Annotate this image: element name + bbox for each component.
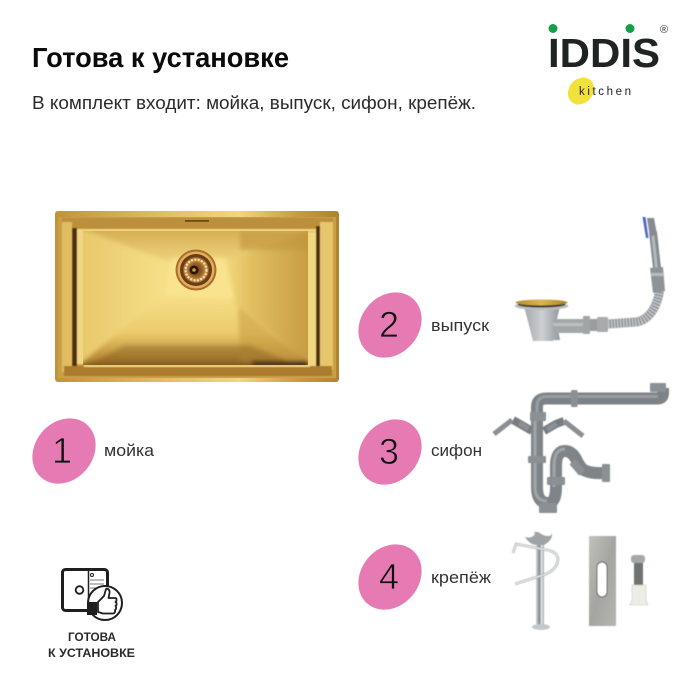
badge 3: [345, 407, 435, 497]
badge 3: 3: [379, 431, 399, 472]
label: выпуск: выпуск: [431, 316, 490, 335]
logo: IDDIS kitchen: [548, 24, 668, 110]
badge 4: 4: [379, 556, 399, 597]
overflow hose: [608, 232, 660, 324]
mounting hardware illustration: [513, 532, 648, 630]
logo: IDDIS kitchen: IDDIS: [548, 30, 660, 76]
basin floor: [83, 231, 308, 365]
badge 2: [345, 280, 435, 370]
overflow head: [647, 218, 657, 238]
badge 2: 2: [379, 304, 399, 345]
label: мойка: мойка: [104, 441, 155, 460]
siphon branches: [494, 420, 583, 436]
logo: IDDIS kitchen: ®: [660, 24, 668, 36]
ready-to-install icon: К УСТАНОВКЕ: [48, 646, 135, 660]
icon caption: ГОТОВА: [68, 630, 116, 644]
siphon collars: [518, 383, 666, 513]
label: сифон: сифон: [431, 441, 482, 460]
badge 1: [19, 406, 109, 496]
clamp bolt: [513, 532, 558, 630]
ready-to-install icon: [48, 570, 135, 660]
subtitle: В комплект входит: мойка, выпуск, сифон, крепёж.: [32, 93, 476, 113]
siphon illustration: [494, 383, 666, 513]
sink drain: [176, 250, 216, 290]
outlet body: [524, 306, 560, 341]
label: крепёж: крепёж: [431, 568, 492, 587]
golden cap: [514, 302, 568, 310]
badge 4: [345, 532, 435, 622]
thumb-up badge: [87, 586, 122, 620]
drain kit illustration: [514, 217, 665, 341]
sink rim: [55, 211, 339, 382]
logo: IDDIS kitchen: kitchen: [579, 86, 631, 98]
title: Готова к установке: [32, 42, 289, 73]
mounting plate: [589, 536, 616, 626]
sink photo: [55, 211, 339, 382]
siphon main pipes: [535, 388, 663, 503]
screw and plug: [630, 555, 648, 605]
badge 1: 1: [52, 430, 72, 471]
